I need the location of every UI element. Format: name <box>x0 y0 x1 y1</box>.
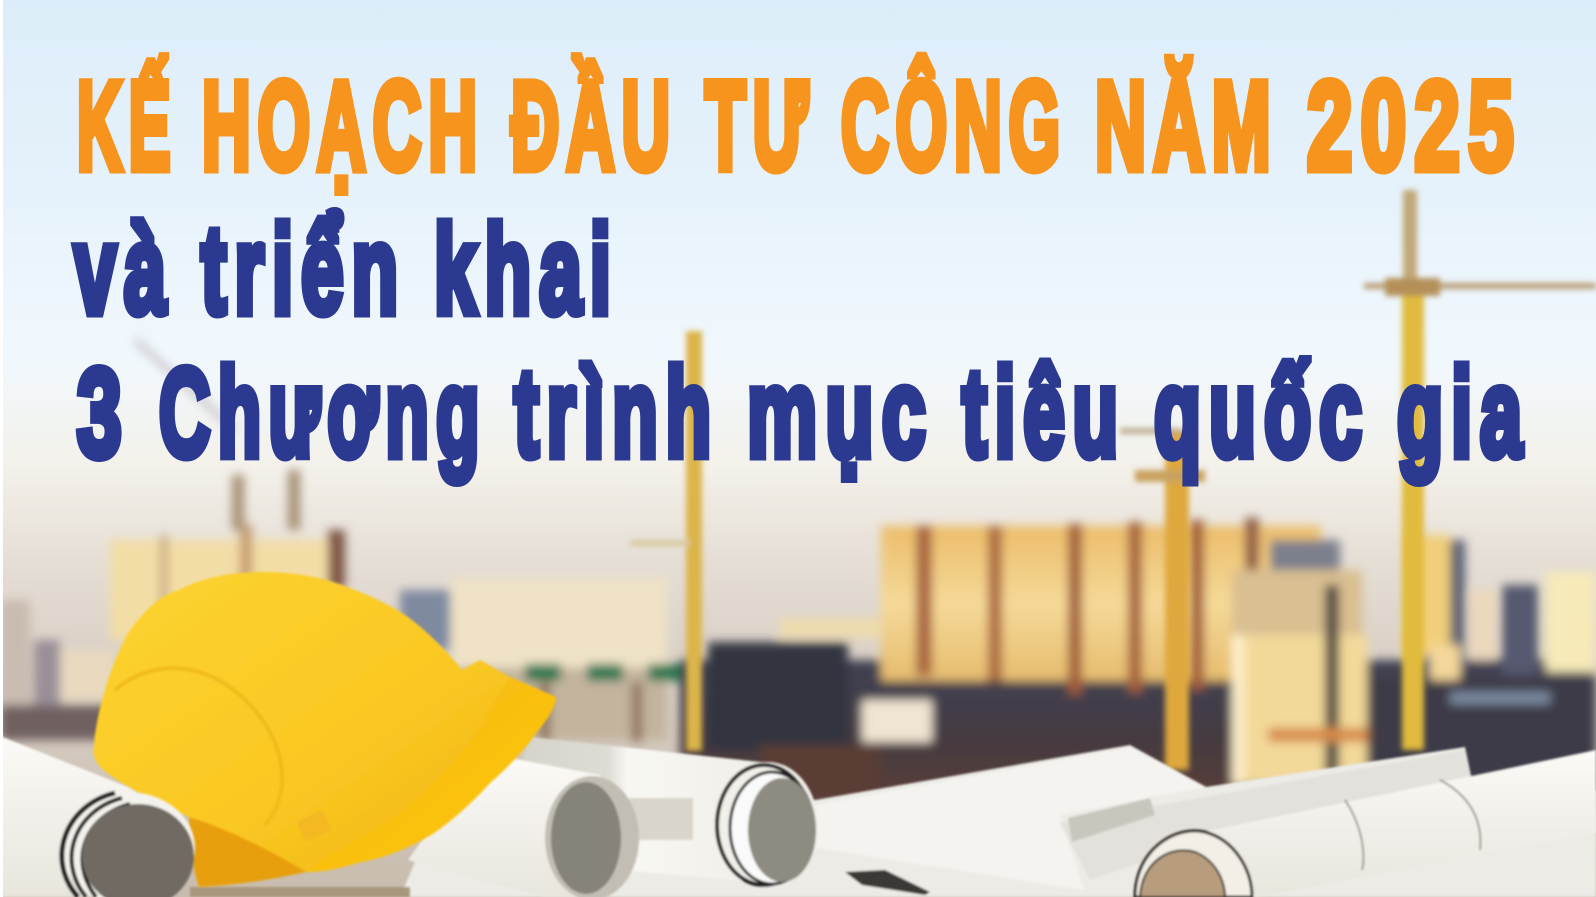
left towers <box>110 540 345 640</box>
tower cranes <box>630 190 1596 770</box>
title: blue line two: triển <box>201 201 406 340</box>
left white edge <box>0 0 3 897</box>
hat underside shadow <box>189 817 306 887</box>
main tower block <box>881 526 1321 681</box>
blurred city skyline <box>0 340 1596 810</box>
crane centre <box>686 331 702 751</box>
table surface <box>190 745 1596 897</box>
title: blue line three: trình <box>514 344 719 483</box>
title: blue line three: Chương <box>159 344 487 483</box>
crane behind tower <box>1165 430 1189 770</box>
blueprint roll right <box>1135 750 1596 897</box>
front tower <box>1270 540 1340 590</box>
title: orange headline <box>77 57 1522 196</box>
drawings on the table <box>0 572 1596 897</box>
dark foreground band <box>680 660 1596 810</box>
icon: yellow hard hat <box>93 572 556 887</box>
hat ridge <box>115 668 282 825</box>
hat brim <box>306 677 556 872</box>
title: blue line three: quốc <box>1154 344 1370 483</box>
blueprint roll left <box>0 736 195 897</box>
title: orange headline: KẾ <box>77 57 177 196</box>
title: orange headline: CÔNG <box>841 57 1067 196</box>
title: orange headline: TƯ <box>705 57 815 196</box>
blueprint roll back <box>510 737 818 888</box>
title: orange headline: NĂM <box>1095 57 1278 196</box>
title: orange headline: HOẠCH <box>202 57 484 196</box>
mid building <box>400 590 450 650</box>
right city <box>1425 540 1465 670</box>
crane right <box>1403 190 1417 290</box>
title: blue line three: tiêu <box>962 344 1126 483</box>
title: blue line three: mục <box>747 344 934 483</box>
blueprint roll middle <box>408 758 639 897</box>
left city <box>0 600 30 730</box>
title: orange headline: ĐẦU <box>511 57 677 196</box>
title: blue line two <box>74 201 619 340</box>
title: blue line three: 3 <box>77 344 130 483</box>
title: blue line three <box>77 344 1530 483</box>
left small cranes <box>232 475 244 530</box>
title: blue line two: và <box>74 201 174 340</box>
title: blue line two: khai <box>434 201 619 340</box>
